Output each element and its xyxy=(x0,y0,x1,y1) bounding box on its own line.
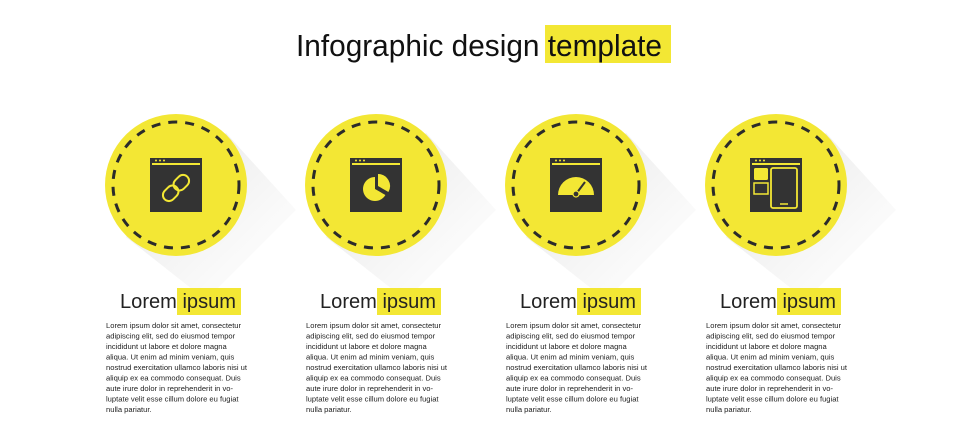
panel: step 2 chart xyxy=(305,114,496,414)
text 1: luptate velit esse cillum dolore eu fugiat xyxy=(106,394,239,404)
circle 2 xyxy=(305,114,496,300)
heading 1: Lorem ipsum xyxy=(120,291,236,313)
text 3: adipiscing elit, sed do eiusmod tempor xyxy=(506,332,636,340)
title: Infographic design template xyxy=(296,28,662,63)
panel: step 1 link xyxy=(105,114,296,414)
text 1: incididunt ut labore et dolore magna xyxy=(106,342,228,351)
text 1: nostrud exercitation ullamco laboris nisi ut xyxy=(106,363,248,372)
text 3: luptate velit esse cillum dolore eu fugiat xyxy=(506,394,639,404)
text 1: aliquip ex ea commodo consequat. Duis xyxy=(106,374,241,382)
text 1: aute irure dolor in reprehenderit in vo- xyxy=(106,384,234,393)
text 3: Lorem ipsum dolor sit amet, consectetur xyxy=(506,321,642,330)
circle 3 xyxy=(505,114,696,300)
text 2: adipiscing elit, sed do eiusmod tempor xyxy=(306,332,436,340)
text 4: Lorem ipsum dolor sit amet, consectetur xyxy=(706,321,842,330)
panel: step 3 speedometer xyxy=(505,114,696,414)
text 2: Lorem ipsum dolor sit amet, consectetur xyxy=(306,321,442,330)
text 4: aute irure dolor in reprehenderit in vo- xyxy=(706,384,834,393)
heading 3: Lorem ipsum xyxy=(520,291,636,313)
icon: responsive window xyxy=(750,158,802,212)
text 3: incididunt ut labore et dolore magna xyxy=(506,342,628,351)
text 4: nulla pariatur. xyxy=(706,405,752,414)
heading 2: Lorem ipsum xyxy=(320,291,436,313)
heading 4: Lorem ipsum xyxy=(720,291,836,313)
text 3: aliquip ex ea commodo consequat. Duis xyxy=(506,374,641,382)
text 4: incididunt ut labore et dolore magna xyxy=(706,342,828,351)
text 3: aute irure dolor in reprehenderit in vo- xyxy=(506,384,634,393)
text 2: nostrud exercitation ullamco laboris nisi ut xyxy=(306,363,448,372)
text 1: aliqua. Ut enim ad minim veniam, quis xyxy=(106,352,235,362)
text 1: nulla pariatur. xyxy=(106,405,152,414)
text 2: aliqua. Ut enim ad minim veniam, quis xyxy=(306,352,435,362)
text 3: nulla pariatur. xyxy=(506,405,552,414)
text 4: aliqua. Ut enim ad minim veniam, quis xyxy=(706,352,835,362)
text 3: nostrud exercitation ullamco laboris nisi ut xyxy=(506,363,648,372)
circle 4 xyxy=(705,114,896,300)
text 2: aute irure dolor in reprehenderit in vo- xyxy=(306,384,434,393)
text 2: nulla pariatur. xyxy=(306,405,352,414)
circle 1 xyxy=(105,114,296,300)
text 4: aliquip ex ea commodo consequat. Duis xyxy=(706,374,841,382)
icon: speedometer window xyxy=(550,158,602,212)
text 1: Lorem ipsum dolor sit amet, consectetur xyxy=(106,321,242,330)
text 1: adipiscing elit, sed do eiusmod tempor xyxy=(106,332,236,340)
text 2: aliquip ex ea commodo consequat. Duis xyxy=(306,374,441,382)
text 4: luptate velit esse cillum dolore eu fugiat xyxy=(706,394,839,404)
text 4: adipiscing elit, sed do eiusmod tempor xyxy=(706,332,836,340)
panel: step 4 responsive xyxy=(705,114,896,414)
text 4: nostrud exercitation ullamco laboris nisi ut xyxy=(706,363,848,372)
text 2: luptate velit esse cillum dolore eu fugiat xyxy=(306,394,439,404)
text 3: aliqua. Ut enim ad minim veniam, quis xyxy=(506,352,635,362)
icon: link window xyxy=(150,158,202,212)
text 2: incididunt ut labore et dolore magna xyxy=(306,342,428,351)
icon: pie chart window xyxy=(350,158,402,212)
